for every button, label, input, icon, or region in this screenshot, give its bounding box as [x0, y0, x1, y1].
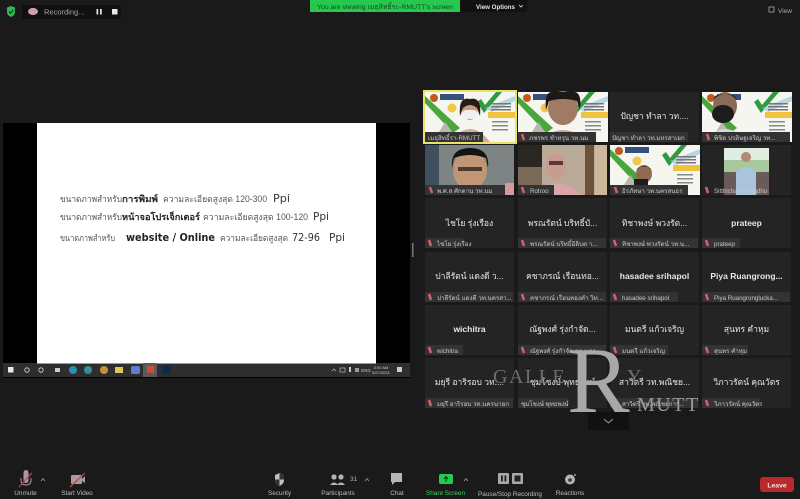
participant gallery [423, 90, 792, 408]
tile: name row 6 col 3: สาวิตรี วท.พณิชย... [619, 377, 690, 387]
slide text line 1 [60, 193, 290, 205]
security button [268, 473, 292, 497]
tile: video 4: พิชิต ปรดิษฐเจริญ วท... [714, 135, 776, 142]
share screen button: Share Screen [426, 490, 465, 497]
view button: View [778, 8, 792, 15]
tile: name row 5 col 3: มนตรี แก้วเจริญ [622, 347, 665, 355]
chat button: Chat [390, 490, 404, 497]
tile: video 6: Rotroo [530, 188, 549, 195]
slide text line 1: ขนาดภาพสำหรับ [60, 194, 122, 204]
tile: name row 6 col 2 [518, 358, 607, 408]
reactions button [556, 474, 584, 497]
start video button [61, 473, 93, 497]
windows taskbar: ENG [361, 368, 371, 373]
leave button [760, 477, 794, 492]
unmute button [14, 470, 45, 497]
tile: name row 3 col 3: ทิชาพงษ์ พวงรัต... [622, 218, 687, 228]
tile: video 7 [610, 145, 700, 195]
tile: name row 6 col 4 [702, 358, 791, 408]
tile: name row 4 col 4: Piya Ruangronglucka... [714, 295, 778, 302]
tile: name only 3: ปัญชา ทำลา วท.มหรสาเยก [612, 135, 685, 142]
slide text line 1: ความละเอียดสูงสุด 120-300 [163, 194, 267, 205]
viewing banner [310, 0, 460, 12]
watermark: Y [627, 366, 641, 388]
tile: name row 3 col 2: พรณรัตน์ บริทธิ์บั... [528, 217, 597, 228]
tile: name row 4 col 4 [702, 252, 791, 302]
tile: name row 3 col 2 [518, 198, 607, 248]
slide text line 3: Ppi [329, 232, 345, 244]
slide page [37, 123, 376, 363]
view button [769, 7, 792, 15]
tile: active speaker [423, 90, 517, 144]
watermark: MUTT [637, 394, 700, 416]
participants button [321, 474, 369, 497]
pause stop recording button: Pause/Stop Recording [478, 491, 542, 498]
tile: name row 5 col 3: มนตรี แก้วเจริญ [625, 324, 684, 334]
tile: name row 5 col 1: wichitra [452, 324, 486, 334]
tile: name row 3 col 2: พรณรัตน์ บริทธิ์อิลิบต า... [530, 239, 598, 248]
tile: video 5 [425, 145, 514, 195]
tile: name row 5 col 2 [518, 305, 607, 355]
watermark: GALLE [493, 366, 566, 388]
start video button: Start Video [61, 490, 93, 497]
tile: video 2 [518, 91, 608, 142]
tile: name row 3 col 3 [610, 198, 699, 248]
view options button [460, 0, 527, 12]
tile: name row 6 col 1: มยุรี อาริรอบ วท.นครนายก [437, 400, 509, 408]
participants button: Participants [321, 490, 355, 497]
tile: name only 3: ปัญชา ทำลา วท.... [620, 111, 689, 121]
tile: name row 3 col 1: ไชโย รุ่งเรือง [445, 218, 493, 229]
tile: name row 3 col 1 [425, 198, 514, 248]
tile: name row 5 col 4 [702, 305, 791, 355]
participants button: 31 [350, 476, 358, 483]
toolbar [14, 470, 794, 498]
windows taskbar [3, 363, 410, 377]
slide text line 1: การพิมพ์ [122, 193, 158, 204]
tile: name row 3 col 3: ทิชาพงษ์ พวงรัตน์ วท.น... [622, 240, 689, 248]
watermark: R [567, 329, 630, 433]
slide text line 3: 72-96 [292, 232, 320, 244]
tile: name row 5 col 1: wichitra [436, 348, 459, 355]
chat button [390, 473, 404, 497]
slide text line 3: website / Online [126, 232, 215, 244]
tile: name only 3 [610, 92, 699, 142]
tile: name row 6 col 1 [425, 358, 514, 408]
tile: video 5: พ.ศ.ส ศักดาน วท.นม [437, 188, 493, 195]
tile: name row 5 col 3 [610, 305, 699, 355]
shared screen [3, 123, 410, 378]
panel divider handle [412, 243, 414, 257]
watermark [493, 329, 700, 433]
tile: name row 4 col 1: ปาลีรัตน์ แดงดี ว... [435, 271, 504, 281]
tile: name row 6 col 2: ชุมโชงษ์ พุทธพงษ์ [521, 400, 569, 408]
tile: video 8: Sitthicha Thongdhu [714, 188, 768, 195]
gallery next page button [588, 412, 629, 430]
slide text line 2: หน้าจอโปรเจ็กเตอร์ [122, 210, 200, 222]
tile: name row 4 col 1 [425, 252, 514, 302]
security button: Security [268, 490, 292, 497]
tile: name row 5 col 2: ณัฐพงศ์ รุ่งกำจัด วท.นคร... [530, 347, 601, 355]
tile: name row 4 col 3: hasadee srihapol [622, 295, 669, 302]
recording indicator: Recording... [44, 8, 84, 16]
windows taskbar: 3:00 AM [374, 365, 388, 370]
tile: name row 4 col 3: hasadee srihapol [620, 271, 689, 281]
tile: name row 4 col 4: Piya Ruangrong... [710, 271, 783, 281]
icon: security shield [7, 6, 15, 17]
tile: name row 4 col 2 [518, 252, 607, 302]
slide text line 2: Ppi [313, 211, 329, 223]
tile: name row 3 col 4 [702, 198, 791, 248]
tile: name row 4 col 3 [610, 252, 699, 302]
reactions button: Reactions [556, 490, 584, 497]
tile: video 6 [518, 145, 607, 195]
slide text line 2 [60, 210, 329, 223]
recording indicator [22, 5, 121, 19]
tile: name row 6 col 2: ชุมโชงษ์ พุทธพงษ์ [530, 377, 596, 388]
tile: name row 5 col 1 [425, 305, 514, 355]
tile: name row 3 col 4: prateep [714, 241, 736, 248]
tile: name row 5 col 4: สุนทร คำหุม [714, 348, 747, 355]
tile: name row 6 col 3: สาวิตรี วท.พณิชยการ... [622, 400, 685, 408]
tile: name row 4 col 2: คชาภรณ์ เรือนทองคำ วิท... [530, 294, 603, 302]
tile: name row 4 col 2: คชาภรณ์ เรือนทอ... [526, 271, 599, 281]
tile: video 4 [702, 92, 792, 142]
leave button: Leave [767, 482, 787, 490]
slide text line 3: ขนาดภาพสำหรับ [60, 233, 115, 243]
tile: name row 6 col 4: วิภาวรัตน์ คุณวัตร [713, 400, 763, 408]
tile: active speaker: เมธุสิทธิ์รา-RMUTT [428, 133, 480, 142]
tile: name row 5 col 2: ณัฐพงศ์ รุ่งกำจัด... [529, 324, 596, 335]
tile: name row 4 col 1: ปาลีรัตน์ แดงดี วท.นครสา... [437, 294, 512, 302]
windows taskbar: 5/27/2021 [372, 370, 391, 375]
slide text line 3 [60, 232, 345, 244]
share screen button [426, 474, 468, 497]
unmute button: Unmute [14, 490, 37, 497]
tile: video 2: ภชรพร ชำหรุน วท.นม [529, 135, 588, 142]
tile: name row 6 col 4: วิภาวรัตน์ คุณวัตร [713, 377, 780, 388]
view options button: View Options [476, 4, 515, 11]
slide text line 2: ขนาดภาพสำหรับ [60, 212, 122, 222]
slide text line 3: ความละเอียดสูงสุด [220, 233, 288, 244]
slide text line 2: ความละเอียดสูงสุด 100-120 [203, 212, 308, 223]
tile: video 8 [702, 145, 791, 195]
tile: name row 5 col 4: สุนทร คำหุม [724, 324, 769, 335]
tile: name row 6 col 1: มยุรี อาริรอบ วท.... [435, 377, 504, 388]
pause stop recording button [478, 473, 542, 498]
tile: name row 6 col 3 [610, 358, 699, 408]
tile: video 7: ธิรภัทษา วท.นครสนธร [622, 188, 683, 195]
tile: name row 3 col 1: ไชโย รุ่งเรือง [436, 240, 472, 248]
viewing banner: You are viewing เมธุสิทธิ์ระ-RMUTT's screen [317, 1, 453, 11]
tile: name row 3 col 4: prateep [731, 218, 762, 228]
slide text line 1: Ppi [273, 193, 290, 205]
